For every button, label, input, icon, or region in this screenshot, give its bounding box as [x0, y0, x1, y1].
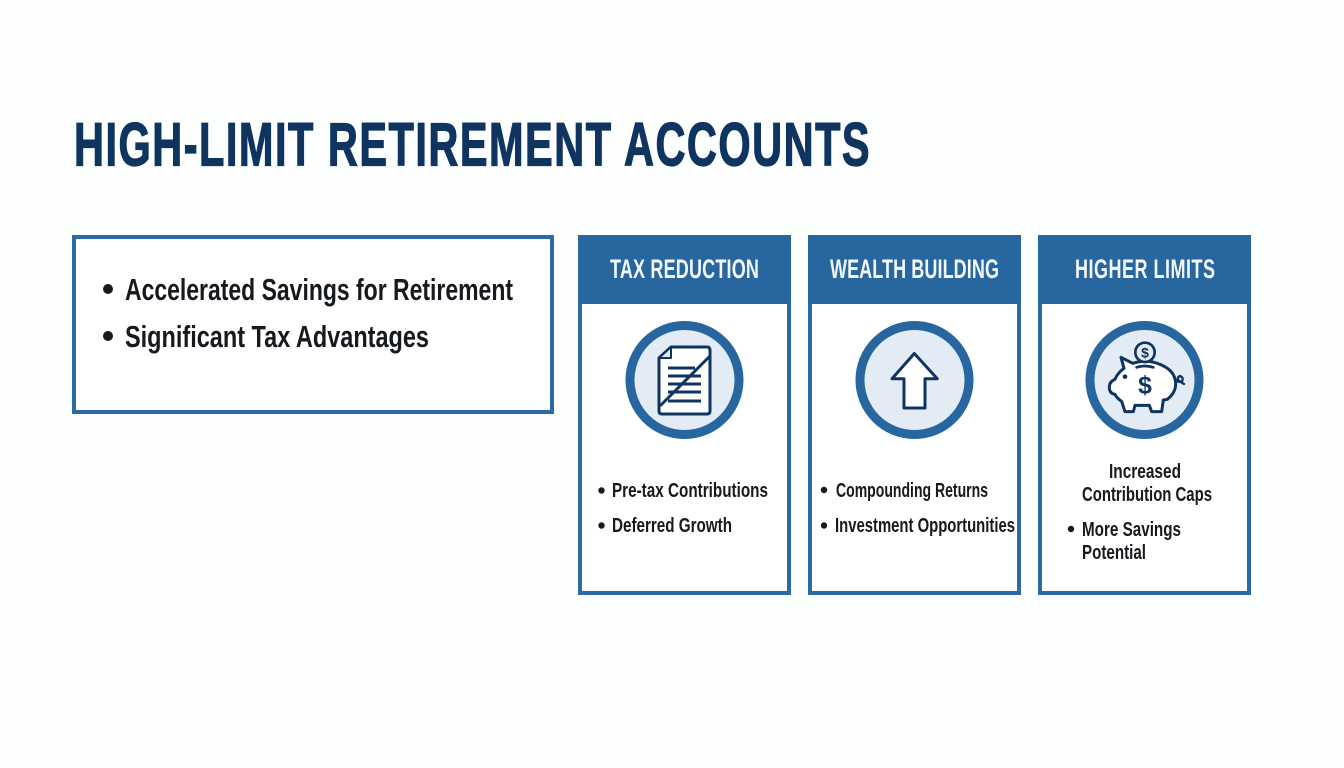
bullet list: wealth building: Investment Opportunities — [835, 515, 1015, 537]
icon: up arrow — [860, 326, 969, 434]
panel: wealth building — [808, 235, 1021, 593]
header: tax reduction: TAX REDUCTION — [610, 253, 759, 284]
bullet list: wealth building: Compounding Returns — [836, 480, 988, 502]
header: higher limits — [1038, 235, 1251, 304]
header: wealth building — [808, 235, 1021, 304]
bullet list: tax reduction — [598, 480, 768, 537]
bullet list: tax reduction: Pre-tax Contributions — [612, 480, 768, 502]
text list: higher limits: Increased — [1109, 461, 1181, 483]
icon: piggy bank with coin: $ — [1138, 372, 1152, 399]
text list: higher limits: Potential — [1082, 542, 1146, 564]
header: tax reduction — [578, 235, 791, 304]
icon: piggy bank with coin: $ — [1141, 344, 1149, 360]
panel: tax reduction — [578, 235, 791, 593]
header: higher limits: HIGHER LIMITS — [1075, 253, 1215, 284]
bullet list: wealth building — [821, 480, 1015, 537]
bullet item: accelerated savings: Accelerated Savings for Retirement — [125, 273, 513, 307]
icon: piggy bank with coin — [1090, 326, 1199, 434]
text list: higher limits: More Savings — [1082, 519, 1181, 541]
title: HIGH-LIMIT RETIREMENT ACCOUNTS — [74, 112, 870, 180]
icon: crossed-out tax document — [630, 326, 739, 434]
bullet item: tax advantages: Significant Tax Advantages — [125, 320, 429, 354]
text list: higher limits: Contribution Caps — [1082, 484, 1212, 506]
panel: key benefits summary — [74, 237, 552, 412]
header: wealth building: WEALTH BUILDING — [830, 253, 999, 284]
text list: higher limits — [1068, 461, 1212, 564]
panel: higher limits — [1038, 235, 1251, 593]
bullet list: tax reduction: Deferred Growth — [612, 515, 732, 537]
